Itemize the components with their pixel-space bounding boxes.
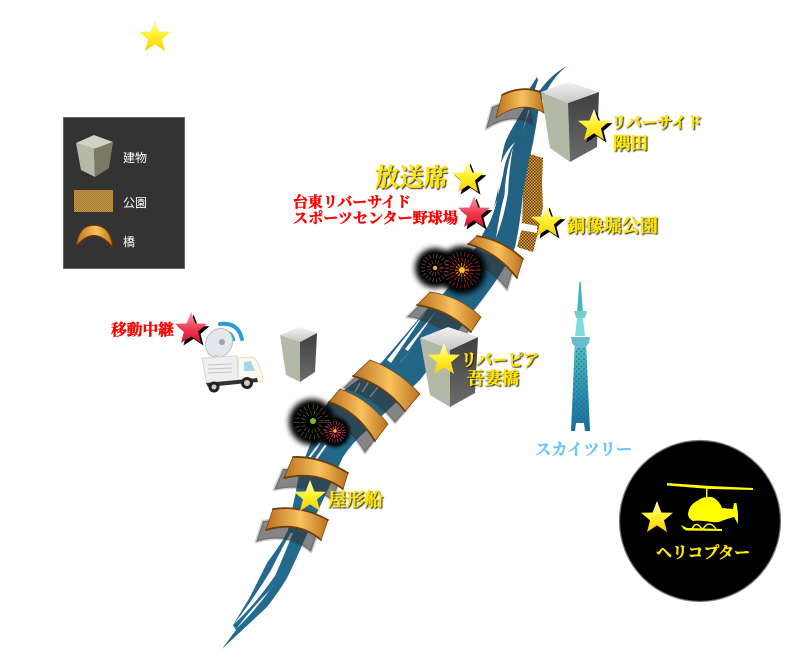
river <box>222 66 567 649</box>
label: sky tree: スカイツリー <box>535 440 632 459</box>
truck cab <box>238 357 263 382</box>
star: top <box>139 20 171 51</box>
legend label: park: 公園 <box>123 196 147 210</box>
bridge 5 <box>319 389 388 453</box>
star: helicopter <box>641 501 673 532</box>
helicopter circle <box>620 440 780 602</box>
legend icon: park <box>74 190 113 212</box>
building: left <box>280 327 317 382</box>
label: taito sports center <box>293 193 458 227</box>
label: statue park: 銅像堀公園 <box>567 216 658 236</box>
bridge 4 <box>343 360 420 423</box>
bridge 6 <box>274 457 348 501</box>
star: mobile relay <box>175 312 210 346</box>
label: taito sports center: 台東リバーサイド <box>293 193 411 211</box>
star: taito sports center <box>458 196 492 230</box>
star: river pier <box>428 343 460 374</box>
label: riverside sumida <box>611 115 702 153</box>
bridge 1 <box>486 89 544 129</box>
label: taito sports center: スポーツセンター野球場 <box>293 210 458 227</box>
star: riverside sumida <box>578 109 612 142</box>
label: mobile relay: 移動中継 <box>111 320 174 339</box>
legend label: building: 建物 <box>123 151 147 165</box>
fireworks: upper pair <box>415 246 486 294</box>
satellite dish <box>200 324 238 362</box>
star: statue park <box>531 205 566 238</box>
label: broadcast booth: 放送席 <box>375 164 448 192</box>
building: centre <box>420 327 478 407</box>
wifi arcs <box>220 324 242 340</box>
truck body <box>202 356 238 385</box>
legend icon: bridge <box>76 225 113 248</box>
bridge 7 <box>256 508 328 552</box>
legend icon: building <box>76 135 113 177</box>
building: top right <box>541 82 599 162</box>
label: river pier azumabashi <box>461 351 539 388</box>
label: river pier azumabashi: 吾妻橋 <box>467 368 519 388</box>
park <box>517 154 543 252</box>
truck wheels <box>206 377 258 392</box>
label: riverside sumida: リバーサイド <box>611 115 702 132</box>
helicopter icon <box>667 483 753 531</box>
river white streaks <box>233 110 530 629</box>
helicopter label: ヘリコプター <box>656 544 750 562</box>
fireworks: lower pair <box>289 399 350 447</box>
star: houseboat <box>294 480 326 511</box>
label: river pier azumabashi: リバーピア <box>461 351 539 370</box>
sky tree tower <box>571 282 590 431</box>
label: riverside sumida: 隅田 <box>613 134 648 153</box>
legend panel <box>64 118 184 268</box>
star: broadcast booth <box>452 161 486 194</box>
bridge 2 <box>458 236 523 290</box>
TV relay truck <box>200 324 263 392</box>
label: houseboat: 屋形船 <box>328 490 383 510</box>
legend label: bridge: 橋 <box>123 235 135 249</box>
bridge 3 <box>407 292 481 344</box>
